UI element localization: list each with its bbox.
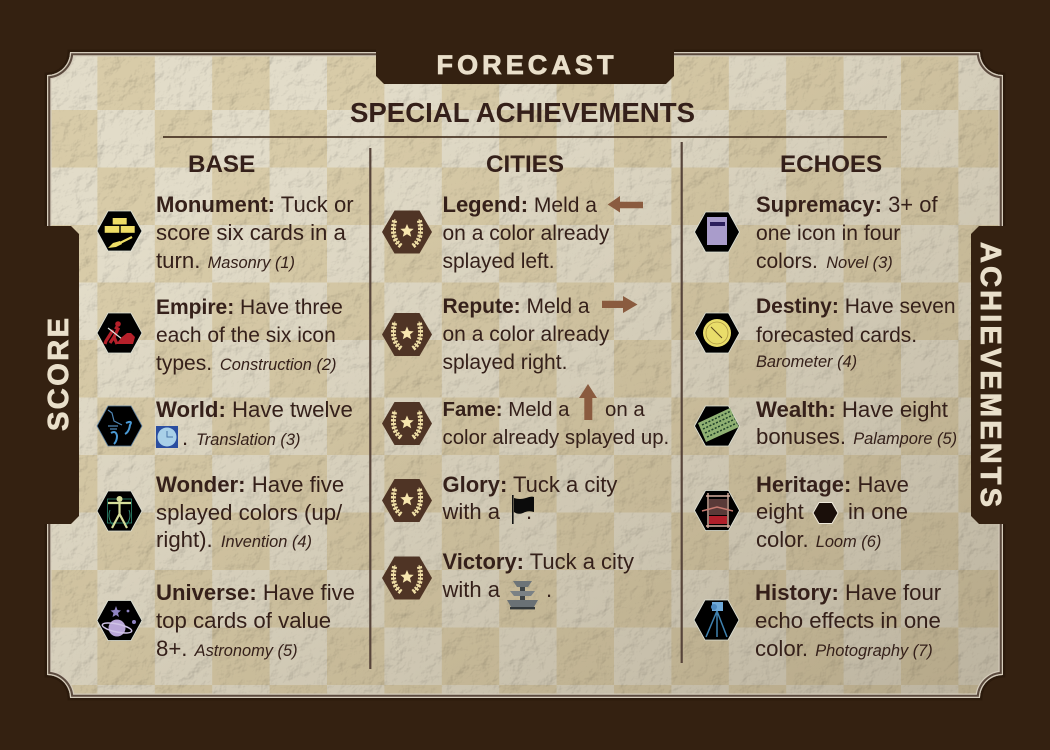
icon: astronomy <box>97 600 142 640</box>
achievement: history: echo effects in one <box>755 608 941 633</box>
tab: score: SCORE <box>43 318 75 431</box>
arrow: right <box>602 296 638 313</box>
icon: invention <box>97 491 142 531</box>
achievement: victory: with a <box>442 577 501 602</box>
achievement: empire: each of the six icon <box>156 324 336 347</box>
achievement: repute: on a color already <box>442 323 610 346</box>
icon: masonry <box>97 211 142 251</box>
achievement: destiny: Barometer (4) <box>756 353 857 371</box>
achievement: supremacy <box>694 192 938 273</box>
tab: score <box>40 226 79 524</box>
arrow: up <box>579 384 597 420</box>
achievement: supremacy: colors. Novel (3) <box>756 250 893 273</box>
achievement: wealth: Wealth: Have eight <box>756 397 948 422</box>
icon: flag <box>512 495 534 524</box>
heading: cities: CITIES <box>486 151 564 178</box>
icon: city laurel <box>382 556 432 600</box>
achievement: empire: Empire: Have three <box>156 296 343 319</box>
achievement: glory: . <box>526 499 532 524</box>
achievement: glory: with a <box>442 499 501 524</box>
icon: translation <box>97 406 142 446</box>
achievement: empire: types. Construction (2) <box>156 352 336 375</box>
achievement: glory: Glory: Tuck a city <box>442 472 617 497</box>
achievement: monument: turn. Masonry (1) <box>156 248 295 273</box>
icon: clock bonus <box>156 426 178 448</box>
frame shadow <box>47 52 1003 698</box>
achievement: heritage: eight <box>756 499 804 524</box>
icon: city laurel <box>382 210 432 254</box>
achievement: legend: Legend: Meld a <box>442 192 597 217</box>
achievement: wealth <box>694 397 957 449</box>
achievement: fame <box>382 384 669 449</box>
achievement: wonder: right). Invention (4) <box>156 527 312 552</box>
achievement: history: History: Have four <box>755 580 942 605</box>
title: SPECIAL ACHIEVEMENTS <box>350 97 695 128</box>
icon: construction <box>97 313 142 353</box>
achievement: fame: color already splayed up. <box>442 427 669 449</box>
achievement: destiny: forecasted cards. <box>756 324 917 347</box>
icon: photography <box>694 600 739 640</box>
icon: city laurel <box>382 313 432 356</box>
achievement: destiny <box>694 295 956 371</box>
achievement: monument: Monument: Tuck or <box>156 192 354 217</box>
icon: palampore <box>694 406 740 446</box>
icon: barometer <box>694 313 740 353</box>
achievement: legend: on a color already <box>442 222 610 245</box>
achievement: heritage: Heritage: Have <box>756 472 909 497</box>
icon: fountain <box>507 581 538 609</box>
achievement: universe <box>97 580 355 661</box>
icon: city laurel <box>382 479 432 522</box>
achievement: universe: 8+. Astronomy (5) <box>156 636 298 661</box>
achievement: repute: Repute: Meld a <box>442 295 590 318</box>
achievement: heritage: in one <box>848 499 908 524</box>
achievement: heritage: color. Loom (6) <box>756 527 881 552</box>
achievement: fame: Fame: Meld a <box>442 399 570 421</box>
achievement: history: color. Photography (7) <box>755 636 933 661</box>
achievement: repute <box>382 295 638 374</box>
achievement: victory <box>382 549 634 609</box>
achievement: fame: on a <box>605 399 645 421</box>
achievement: wonder <box>97 472 344 552</box>
heading: base: BASE <box>188 151 255 178</box>
achievement: monument <box>97 192 354 273</box>
column: echoes <box>694 151 957 661</box>
achievement: victory: . <box>546 577 552 602</box>
achievement: supremacy: Supremacy: 3+ of <box>756 192 938 217</box>
column: base <box>97 151 355 661</box>
achievement: supremacy: one icon in four <box>756 222 900 245</box>
achievement: repute: splayed right. <box>442 351 567 374</box>
achievement: legend <box>382 192 643 273</box>
achievement: destiny: Destiny: Have seven <box>756 295 956 318</box>
achievement: glory <box>382 472 617 524</box>
icon: hex bonus <box>813 502 838 524</box>
icon: novel <box>694 212 740 252</box>
heading: echoes: ECHOES <box>780 151 882 178</box>
tab: forecast <box>376 40 674 84</box>
achievement: world: . <box>182 425 188 450</box>
icon: city laurel <box>382 402 432 445</box>
achievement: wonder: splayed colors (up/ <box>156 500 343 525</box>
achievement: wonder: Wonder: Have five <box>156 472 344 497</box>
achievement: wealth: bonuses. Palampore (5) <box>756 424 957 449</box>
achievement: empire <box>97 296 343 375</box>
achievement: victory: Victory: Tuck a city <box>442 549 634 574</box>
arrow: left <box>608 196 643 212</box>
achievement: universe: top cards of value <box>156 608 331 633</box>
column: cities <box>382 151 669 609</box>
icon: loom <box>694 490 740 530</box>
achievement: world: World: Have twelve <box>156 397 353 422</box>
achievement: monument: score six cards in a <box>156 220 347 245</box>
achievement: world: Translation (3) <box>196 431 300 449</box>
tab: forecast: FORECAST <box>436 50 614 80</box>
achievement: history <box>694 580 942 661</box>
achievement: heritage <box>694 472 909 552</box>
achievement: world <box>97 397 353 450</box>
achievement: legend: splayed left. <box>442 250 555 273</box>
achievement: universe: Universe: Have five <box>156 580 355 605</box>
tab: achievements: ACHIEVEMENTS <box>974 242 1006 507</box>
